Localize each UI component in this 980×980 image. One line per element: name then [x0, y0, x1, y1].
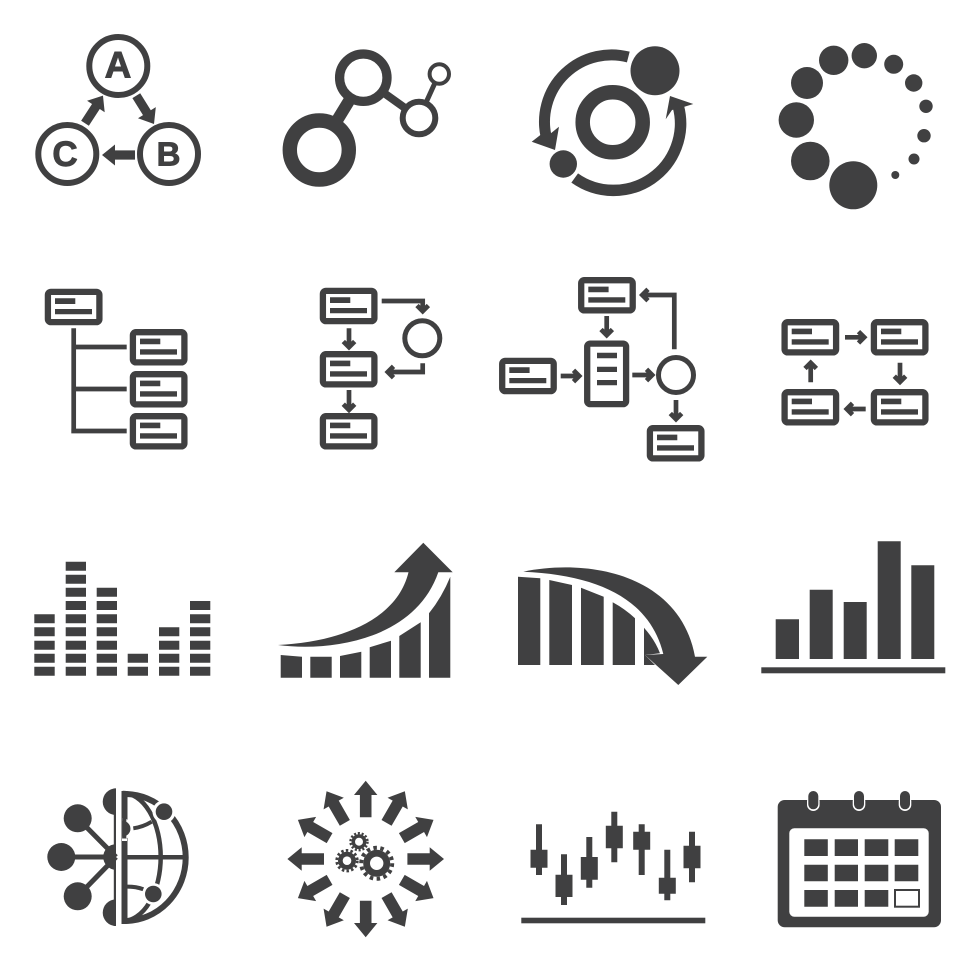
- decision circle: [405, 321, 440, 356]
- falling arrow: [523, 567, 707, 685]
- icon: flowchart with loop: [323, 291, 440, 446]
- box top left: [785, 322, 836, 352]
- third ring: [403, 102, 435, 134]
- column 4: [128, 654, 148, 676]
- column 6: [190, 601, 210, 676]
- column 1: [34, 614, 55, 676]
- arrow circle to bottom box: [670, 400, 682, 419]
- node B: [140, 125, 198, 183]
- small gear: [350, 833, 368, 850]
- root box: [48, 292, 99, 322]
- icon: A B C cycle: [38, 37, 198, 183]
- candle 4: [606, 812, 623, 862]
- icon: connected rings: [290, 54, 449, 179]
- column 5: [159, 627, 179, 676]
- candle 6: [659, 850, 676, 900]
- column 3: [97, 588, 117, 676]
- candle 7: [684, 832, 700, 882]
- child box 3: [133, 416, 184, 446]
- candle 5: [633, 824, 650, 875]
- icon: orbit with arrows: [532, 46, 693, 190]
- large gear: [361, 848, 392, 879]
- large planet: [630, 46, 680, 95]
- elbow arrow circle to top box: [642, 289, 674, 349]
- arrow B to C: [102, 144, 135, 166]
- node C: [38, 125, 96, 183]
- arrow down: [894, 363, 906, 382]
- lower arrow head: [666, 96, 693, 119]
- upper orbit arc: [544, 55, 628, 136]
- circle node: [658, 358, 694, 392]
- fourth ring: [430, 64, 449, 84]
- arrow right: [845, 332, 864, 343]
- network nodes: [47, 788, 116, 926]
- icon: falling bars with arrow: [518, 567, 707, 685]
- node A: [89, 37, 147, 95]
- column 2: [66, 562, 86, 676]
- box bottom: [323, 416, 374, 446]
- icon: gears with radial arrows: [287, 781, 444, 937]
- arrow left box to document: [561, 370, 579, 382]
- large ring: [290, 120, 349, 180]
- bars: [776, 541, 934, 659]
- arrow up: [805, 363, 816, 382]
- arrow left: [847, 403, 866, 415]
- binder rings: [807, 791, 911, 811]
- arrow top box to document: [601, 316, 612, 335]
- rising bars: [281, 577, 450, 678]
- node A: A: [105, 44, 131, 85]
- upper arrow head: [532, 127, 559, 150]
- icon: loading dots: [779, 43, 933, 209]
- icon: equalizer chart: [34, 562, 210, 676]
- box middle: [323, 354, 374, 384]
- box left: [502, 361, 554, 391]
- tree connector lines: [71, 328, 127, 431]
- medium gear: [337, 850, 357, 871]
- centre ring: [583, 92, 643, 152]
- connector middle: [363, 78, 419, 118]
- baseline: [761, 667, 945, 673]
- box bottom left: [785, 392, 836, 422]
- candle 1: [530, 824, 548, 875]
- child box 1: [133, 332, 184, 362]
- arrow document to circle: [632, 369, 652, 381]
- box top: [323, 291, 374, 321]
- box top right: [874, 322, 925, 352]
- lower orbit arc: [575, 107, 681, 190]
- arrow C to A: [76, 90, 112, 129]
- node C: C: [52, 135, 78, 174]
- candle 2: [556, 854, 572, 905]
- tall document box: [587, 344, 626, 404]
- calendar body: [778, 800, 941, 927]
- arrow top to middle: [343, 328, 355, 347]
- icon: candlestick chart: [521, 812, 705, 923]
- arrow middle to bottom: [343, 390, 355, 410]
- icon: bar chart: [761, 541, 945, 673]
- candle 3: [581, 837, 598, 888]
- arrow A to B: [127, 90, 163, 130]
- radial arrows: [287, 781, 444, 937]
- second ring: [340, 54, 387, 101]
- connectors: [319, 78, 363, 150]
- node B: B: [157, 136, 180, 173]
- child box 2: [133, 374, 184, 404]
- globe half: [122, 791, 186, 924]
- day grid: [804, 839, 918, 907]
- connector small: [419, 74, 439, 118]
- baseline: [521, 918, 705, 923]
- page: [789, 828, 929, 917]
- icon: tree diagram: [48, 292, 184, 446]
- box bottom: [650, 428, 701, 458]
- icon: network globe: [47, 788, 186, 926]
- elbow arrow to circle: [382, 301, 428, 311]
- box top: [581, 280, 633, 310]
- elbow arrow from circle: [388, 363, 423, 378]
- icon: calendar: [778, 791, 941, 927]
- icon: process flowchart: [502, 280, 701, 458]
- box bottom right: [874, 392, 925, 422]
- small planet: [550, 150, 577, 178]
- rising arrow: [278, 543, 453, 647]
- icon: rising bars with arrow: [278, 543, 453, 678]
- icon: four step cycle: [785, 322, 925, 422]
- highlighted day: [895, 890, 919, 907]
- falling bars: [518, 577, 660, 665]
